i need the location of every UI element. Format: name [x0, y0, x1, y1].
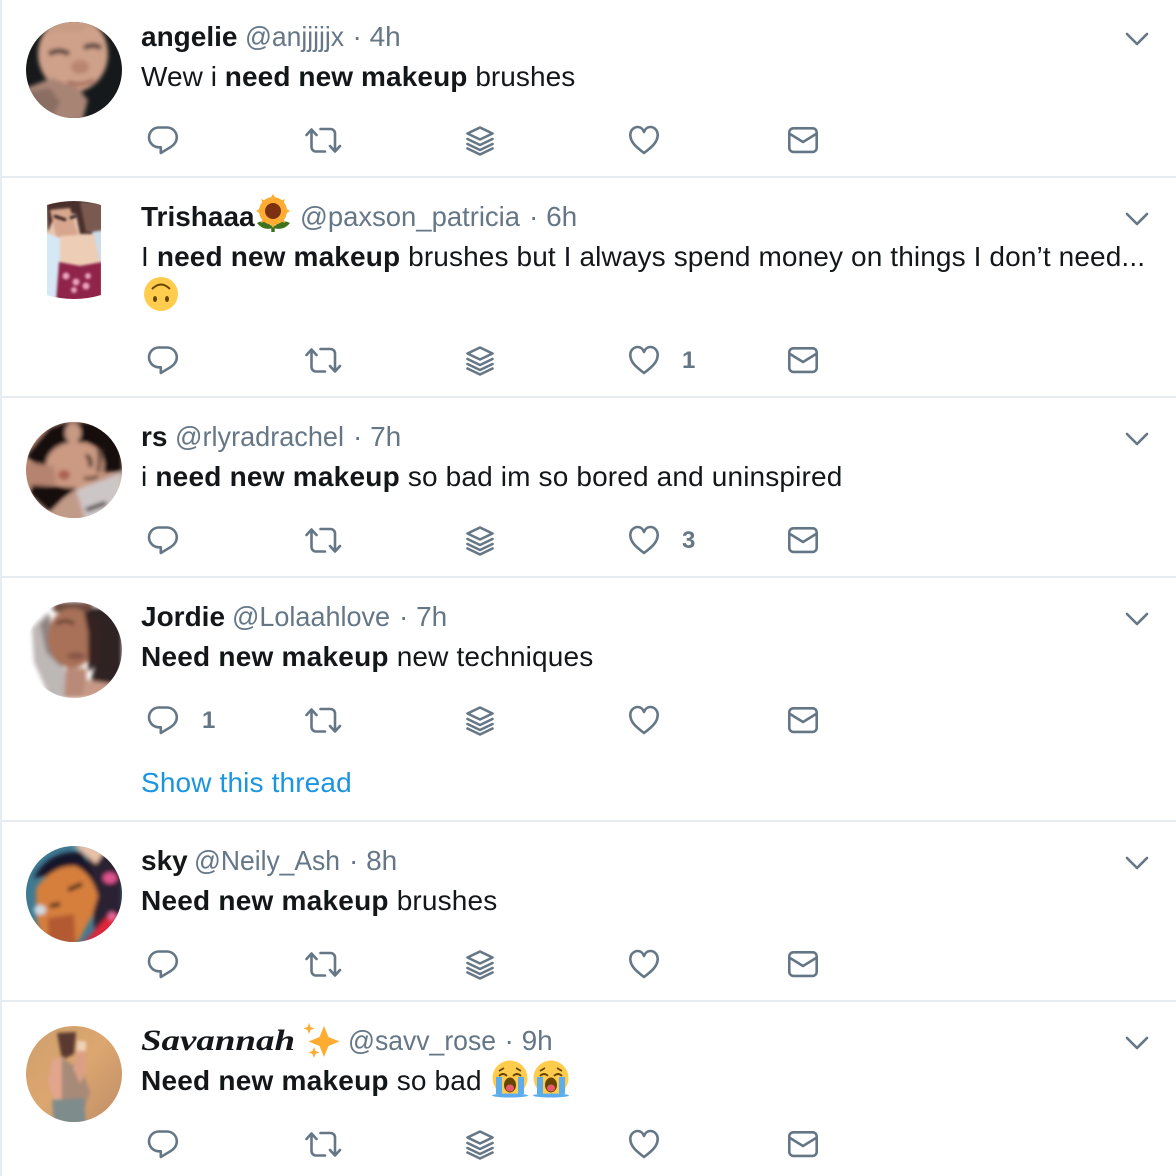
name and handle: @Neily_Ash — [194, 845, 340, 876]
name and handle: · 7h — [353, 421, 401, 452]
icon: loudly crying emoji — [492, 1060, 528, 1098]
tweet text: Need new makeup so bad — [141, 1065, 482, 1096]
avatar: sky — [26, 844, 126, 946]
chevron — [1127, 214, 1147, 224]
tweet text: Need new makeup new techniques — [141, 641, 593, 672]
handle: @savv_rose — [348, 1025, 496, 1056]
icon: loudly crying emoji — [533, 1060, 569, 1098]
action icons — [149, 434, 1147, 554]
action icons — [149, 347, 817, 374]
panel: tweet by rs — [26, 421, 1147, 554]
panel: tweet by angelie — [26, 16, 1147, 154]
panel: tweet by sky — [26, 844, 1147, 978]
name and handle: · 4h — [352, 21, 401, 52]
name and handle: · 6h — [529, 201, 577, 232]
tweet text: Need new makeup brushes — [141, 885, 497, 916]
like count: 1 — [682, 347, 695, 374]
tweet text: Wew i need new makeup brushes — [141, 61, 575, 92]
name and handle: sky — [141, 845, 188, 876]
avatar: Trishaaa — [47, 201, 101, 299]
icon: sunflower emoji — [256, 194, 290, 232]
tweet text: I need new makeup brushes but I always spend money on things I don’t need... — [141, 241, 1145, 272]
tweet text: i need new makeup so bad im so bored and uninspired — [141, 461, 842, 492]
avatar: angelie — [26, 16, 122, 122]
name and handle: Jordie — [141, 601, 225, 632]
action icons — [149, 614, 1147, 734]
action icons — [149, 1038, 1147, 1158]
avatar: Jordie — [26, 602, 122, 698]
like count: 3 — [682, 527, 695, 554]
reply count: 1 — [202, 707, 215, 734]
icon: sparkles emoji — [304, 1023, 340, 1058]
name and handle: angelie — [141, 21, 237, 52]
action icons — [149, 34, 1147, 154]
name and handle: · 7h — [399, 601, 447, 632]
name and handle: @paxson_patricia — [300, 201, 520, 232]
avatar: rs — [26, 422, 122, 522]
name and handle: rs — [141, 421, 167, 452]
handle: · 9h — [504, 1025, 553, 1056]
name and handle: @Lolaahlove — [232, 601, 390, 632]
name and handle: @anjjjjjx — [245, 21, 344, 52]
name and handle: @rlyradrachel — [175, 421, 344, 452]
panel: tweet by Savannah — [26, 1023, 1147, 1158]
avatar: Savannah — [26, 1026, 122, 1126]
show thread link: Show this thread — [141, 767, 352, 798]
panel: tweet by Trishaaa — [26, 194, 1147, 374]
name and handle: Trishaaa — [141, 201, 255, 232]
name: Savannah — [141, 1024, 295, 1057]
action icons — [149, 858, 1147, 978]
name and handle: · 8h — [349, 845, 397, 876]
panel: tweet by Jordie — [26, 601, 1147, 798]
icon: upside-down face emoji — [144, 277, 178, 311]
